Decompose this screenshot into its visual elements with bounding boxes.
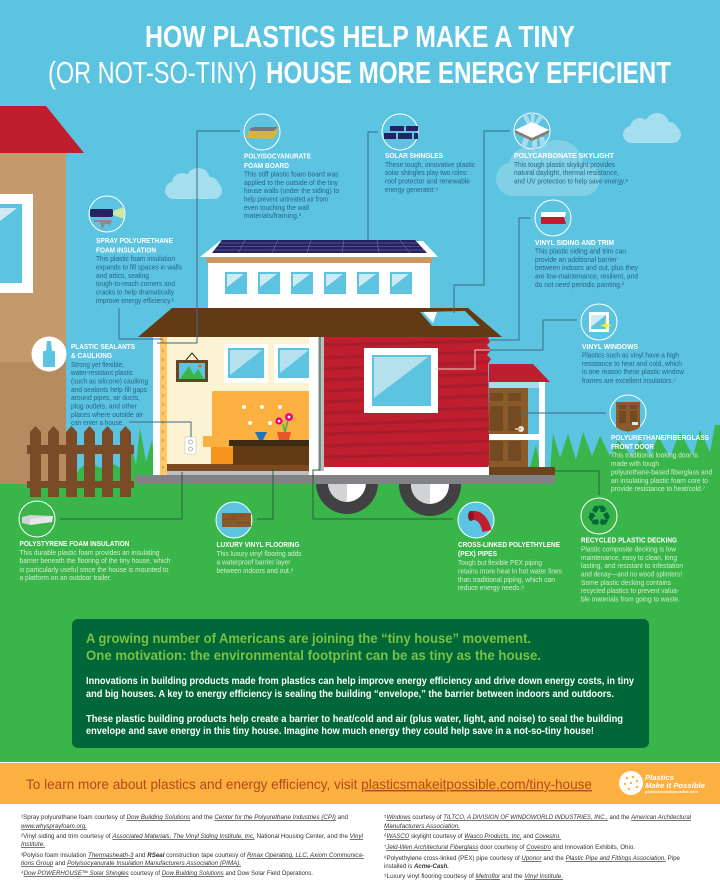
cup <box>255 432 267 440</box>
callout: solar shingles: energy generator.⁴ <box>385 185 438 194</box>
callout: polyisocyanurate foam board: house walls (under the siding) to <box>244 186 339 195</box>
tiny house red exterior <box>318 337 492 475</box>
callout: polystyrene foam: POLYSTYRENE FOAM INSULATION <box>20 539 130 548</box>
footnotes left column: Institute. <box>21 841 45 848</box>
callout: PEX pipes: than traditional piping, which can <box>458 575 555 584</box>
porch sky gap <box>489 382 539 388</box>
callout: recycled plastic decking: maintenance, easy to clean, long <box>581 553 677 562</box>
icon: door <box>610 395 646 432</box>
interior window left <box>224 344 268 383</box>
callout: vinyl siding and trim: between indoors and out, plus they <box>535 263 638 272</box>
callout: polyisocyanurate foam board: applied to the outside of the tiny <box>244 178 338 187</box>
grass ground <box>0 425 720 762</box>
callout: plastic sealants and caulking: places where outside air <box>71 410 144 419</box>
callout: solar shingles: solar shingles play two roles: <box>385 168 468 177</box>
callout: spray polyurethane: This plastic foam insulation <box>96 254 175 263</box>
footnotes right column: installed is Acme-Cash. <box>384 863 449 870</box>
callout: front door: made with tough <box>611 459 659 468</box>
callout: plastic sealants and caulking: (such as silicone) caulking <box>71 376 148 386</box>
white base trim <box>324 467 489 475</box>
gray wall section <box>318 337 324 471</box>
callout: front door: polyurethane-based fiberglass and <box>611 468 712 476</box>
callout: vinyl windows: Plastics such as vinyl have a high <box>582 350 679 360</box>
footnotes right column: ⁹Luxury vinyl flooring courtesy of Metroflor and the Vinyl Institute. <box>384 873 563 880</box>
callout: vinyl siding and trim: This plastic siding and trim can <box>535 246 626 256</box>
callout: vinyl windows: frames are excellent insulators.⁵ <box>582 376 676 385</box>
callout: polystyrene foam: a platform on an outdoor trailer. <box>20 573 112 582</box>
icon: shingles <box>382 114 418 150</box>
callout: PEX pipes: reduce energy needs.⁸ <box>458 583 524 592</box>
flower pot <box>275 413 293 440</box>
red wall window <box>364 348 438 413</box>
callout: PEX pipes: Tough but flexible PEX piping <box>458 558 542 567</box>
callout: recycled plastic decking: RECYCLED PLASTIC DECKING <box>581 536 677 544</box>
callout: polycarbonate skylight <box>514 113 628 186</box>
logo: Plastics Make it Possible: Plastics <box>645 773 674 782</box>
callout: polystyrene foam <box>19 501 170 582</box>
icon: foam slab <box>19 501 55 537</box>
callout: luxury vinyl flooring <box>216 502 302 575</box>
callout: polyisocyanurate foam board: POLYISOCYANURATE <box>244 152 311 160</box>
callout: luxury vinyl flooring: LUXURY VINYL FLOORING <box>216 540 300 549</box>
callout: front door: FRONT DOOR <box>611 442 654 451</box>
callout: polyisocyanurate foam board: materials/framing.³ <box>244 211 302 220</box>
callout: plastic sealants and caulking: around pipes, air ducts, <box>71 393 140 402</box>
callout: solar shingles <box>382 114 475 194</box>
callout: vinyl siding and trim: provide an additional barrier <box>535 255 618 264</box>
callout: vinyl windows <box>581 304 685 385</box>
picture frame <box>176 353 208 382</box>
panel heading: One motivation: the environmental footprint can be as tiny as the house. <box>86 647 541 663</box>
sky background <box>0 0 720 490</box>
callout: spray polyurethane <box>89 196 182 305</box>
callout: plastic sealants and caulking: PLASTIC SEALANTS <box>71 342 135 351</box>
loft wall <box>208 263 430 310</box>
callout: recycled plastic decking <box>581 498 683 604</box>
callout: spray polyurethane: improve energy efficiency.¹ <box>96 296 175 305</box>
porch roof <box>489 364 550 382</box>
icon: red pipe <box>458 502 494 538</box>
callout: vinyl windows: is one reason these plastic window <box>582 367 685 376</box>
callout: luxury vinyl flooring: between indoors and out.⁹ <box>216 566 294 575</box>
cloud right <box>623 113 681 143</box>
brown main roof <box>138 308 502 337</box>
callout: recycled plastic decking: lasting, and resistant to infestation <box>581 561 683 570</box>
panel body text: envelope and save energy in this tiny house. Imagine how much energy they could help save in a not-so-tiny house! <box>86 725 594 737</box>
callout: spray polyurethane: FOAM INSULATION <box>96 246 156 254</box>
callout: recycled plastic decking: ble materials from going to waste. <box>581 594 680 604</box>
icon: caulk tube <box>32 336 66 372</box>
icon: skylight <box>514 113 550 149</box>
callout: plastic sealants and caulking: and sealants help fill gaps <box>71 385 147 394</box>
icon: siding sample <box>535 200 571 236</box>
callout: polycarbonate skylight: natural daylight, thermal resistance, <box>514 168 619 177</box>
panel heading: A growing number of Americans are joining the “tiny house” movement. <box>86 630 531 646</box>
icon: window with sparkle <box>581 304 617 340</box>
callout: spray polyurethane: tough-to-reach corners and <box>96 279 175 288</box>
callout: polycarbonate skylight: This tough plastic skylight provides <box>514 160 615 169</box>
cutaway interior <box>153 337 324 475</box>
icon: recycling symbol: ♻ <box>586 499 612 533</box>
trailer platform <box>135 475 555 484</box>
title <box>48 19 671 90</box>
callout: plastic sealants and caulking: can enter a house. <box>71 418 124 427</box>
roof skylight <box>420 311 480 326</box>
footnotes right column <box>384 814 691 880</box>
callout: vinyl siding and trim <box>535 200 638 289</box>
callout: polycarbonate skylight: and UV protection to help save energy.⁶ <box>514 176 628 186</box>
logo: Plastics Make it Possible: Make it Possible <box>645 781 705 790</box>
callout: vinyl windows: resistance to heat and cold, which <box>582 359 682 368</box>
callout: vinyl windows: VINYL WINDOWS <box>582 342 638 351</box>
footnotes left column: ⁴Dow POWERHOUSE™ Solar Shingles courtesy of Dow Building Solutions and Dow Solar Field Operations. <box>21 870 313 877</box>
callout: plastic sealants and caulking <box>32 336 148 427</box>
callout: polyisocyanurate foam board: FOAM BOARD <box>244 161 289 170</box>
loft windows <box>225 272 412 294</box>
neighbouring house window <box>0 194 33 293</box>
callout: plastic sealants and caulking: & CAULKING <box>71 351 112 360</box>
callout: front door: This traditional looking door is <box>611 450 698 460</box>
callout: front door <box>610 395 712 493</box>
picket fence <box>27 426 134 497</box>
callout: recycled plastic decking: Some plastic decking contains <box>581 578 671 587</box>
footnotes left column: tions Group and Polyisocyanurate Insulation Manufacturers Association (PIMA). <box>21 860 241 867</box>
callout: plastic sealants and caulking: Strong yet flexible, <box>71 360 124 369</box>
footnotes right column: ⁷Jeld-Wen Architectural Fiberglass door courtesy of Covestro and Innovation Exhibits, Ohio. <box>384 844 635 851</box>
leader lines <box>60 131 606 519</box>
panel body text <box>86 675 634 737</box>
porch post and rail <box>539 382 545 468</box>
callout: solar shingles: SOLAR SHINGLES <box>385 151 443 160</box>
floor <box>167 464 309 471</box>
wheel front <box>316 452 378 514</box>
callout: polyisocyanurate foam board <box>244 114 339 220</box>
callout: polystyrene foam: barrier beneath the flooring of the tiny house, which <box>20 556 170 565</box>
wheel rear <box>399 454 461 516</box>
callout: solar shingles: roof protector and renewable <box>385 176 470 186</box>
porch <box>489 364 555 475</box>
banner text: To learn more about plastics and energy efficiency, visit plasticsmakeitpossible.com/tiny-house <box>26 776 592 792</box>
footnotes left column <box>21 814 365 877</box>
callout: plastic sealants and caulking: plug outlets, and other <box>71 402 138 410</box>
callout: polystyrene foam: This durable plastic foam provides an insulating <box>20 548 160 557</box>
callout: polyisocyanurate foam board: help prevent untreated air from <box>244 194 328 204</box>
callout: front door: an insulating plastic foam core to <box>611 476 708 485</box>
icon: wood plank <box>216 502 252 538</box>
callout: PEX pipes: (PEX) PIPES <box>458 549 497 558</box>
sofa <box>203 391 309 464</box>
panel body text: Innovations in building products made from plastics can help improve energy efficiency and drive down energy costs, in tiny <box>86 675 634 687</box>
foam insulation strip <box>160 337 167 475</box>
footnotes left column: ²Vinyl siding and trim courtesy of Associated Materials, The Vinyl Siding Institute, Inc, National Housing Center, and the Vinyl <box>21 833 363 840</box>
neighbouring house <box>0 106 84 492</box>
callout: PEX pipes: CROSS-LINKED POLYETHYLENE <box>458 540 560 549</box>
callout: luxury vinyl flooring: This luxury vinyl flooring adds <box>216 549 302 558</box>
callout: polycarbonate skylight: POLYCARBONATE SKYLIGHT <box>514 151 614 160</box>
interior wall <box>153 337 324 475</box>
callout: plastic sealants and caulking: water-resistant plastic <box>70 368 133 377</box>
neighbouring house roof <box>0 106 84 153</box>
callout: spray polyurethane: expands to fill spaces in walls <box>96 262 182 272</box>
footnotes left column: www.whysprayfoam.org. <box>21 823 87 830</box>
panel heading <box>86 630 541 663</box>
neighbouring house wall <box>0 153 66 362</box>
interior window right <box>274 344 309 383</box>
footnotes background <box>0 804 720 882</box>
cloud behind skylight text <box>496 140 600 196</box>
panel body text: These plastic building products help create a barrier to heat/cold and air (plus water, light, and noise) to seal the building <box>86 713 623 725</box>
cloud left <box>165 168 222 199</box>
callout: recycled plastic decking: recycled plastics to prevent valua- <box>581 586 680 595</box>
red siding <box>324 337 492 467</box>
callout: vinyl siding and trim: do not need periodic painting.² <box>535 280 625 289</box>
panel body text: and big houses. A key to energy efficiency is sealing the building “envelope,” the barrier between indoors and outdoors. <box>86 688 614 700</box>
title: (OR NOT-SO-TINY) <box>48 55 257 90</box>
footnotes right column: ⁸Polyethylene cross-linked (PEX) pipe courtesy of Uponor and the Plastic Pipe and Fittings Association. Pipe <box>384 855 680 862</box>
callout: recycled plastic decking: and decay—and no wood splinters! <box>581 570 682 578</box>
callout: vinyl siding and trim: are low-maintenance, resilient, and <box>535 272 638 280</box>
front door <box>489 388 528 467</box>
callout: PEX pipes <box>458 502 562 592</box>
callout: spray polyurethane: SPRAY POLYURETHANE <box>96 236 173 245</box>
callout: polyisocyanurate foam board: This stiff plastic foam board was <box>244 170 339 178</box>
title: HOW PLASTICS HELP MAKE A TINY <box>145 19 575 54</box>
callout: PEX pipes: retains more heat in hot water lines <box>458 566 562 576</box>
footnotes left column: ³Polyiso foam insulation Thermasheath-3 and RSeal construction tape courtesy of Rmax Operating, LLC, Axiom Communica- <box>21 852 365 859</box>
icon: spray gun <box>89 196 125 232</box>
footnotes right column: Manufacturers Association. <box>384 823 460 830</box>
logo: Plastics Make it Possible <box>619 771 705 795</box>
callout: spray polyurethane: cracks to help dramatically <box>96 288 174 296</box>
icon: foam board <box>244 114 280 150</box>
callout: polystyrene foam: is particularly useful since the house is mounted to <box>20 565 168 574</box>
callout: front door: provide resistance to heat/cold.⁷ <box>611 484 705 493</box>
callout: vinyl siding and trim: VINYL SIDING AND TRIM <box>535 238 614 247</box>
tiny house upper loft <box>200 240 438 310</box>
callout: polyisocyanurate foam board: even touching the wall <box>244 203 309 212</box>
callout: solar shingles: These tough, innovative plastic <box>385 160 475 169</box>
callout: luxury vinyl flooring: a waterproof barrier layer <box>216 558 291 566</box>
footnotes left column: ¹Spray polyurethane foam courtesy of Dow Building Solutions and the Center for the Polyurethane Industries (CPI) and <box>21 814 348 821</box>
callout: recycled plastic decking: Plastic composite decking is low <box>581 544 677 554</box>
wall outlet <box>185 437 196 454</box>
footnotes right column: ⁶WASCO skylight courtesy of Wasco Products, Inc, and Covestro. <box>384 833 561 840</box>
panel: tiny house movement <box>72 619 649 748</box>
call-to-action banner <box>0 763 720 804</box>
logo: Plastics Make it Possible: plasticsmakeitpossible.com <box>644 790 698 794</box>
recycled deck <box>489 467 555 475</box>
solar panel array <box>212 240 427 253</box>
callout: spray polyurethane: and attics, sealing <box>96 271 149 280</box>
loft white roof <box>200 241 438 257</box>
table <box>229 440 309 465</box>
siding stripes <box>324 341 490 457</box>
footnotes right column: ⁵Windows courtesy of TILTCO, A DIVISION OF WINDOWORLD INDUSTRIES, INC., and the American Architectural <box>384 814 691 821</box>
